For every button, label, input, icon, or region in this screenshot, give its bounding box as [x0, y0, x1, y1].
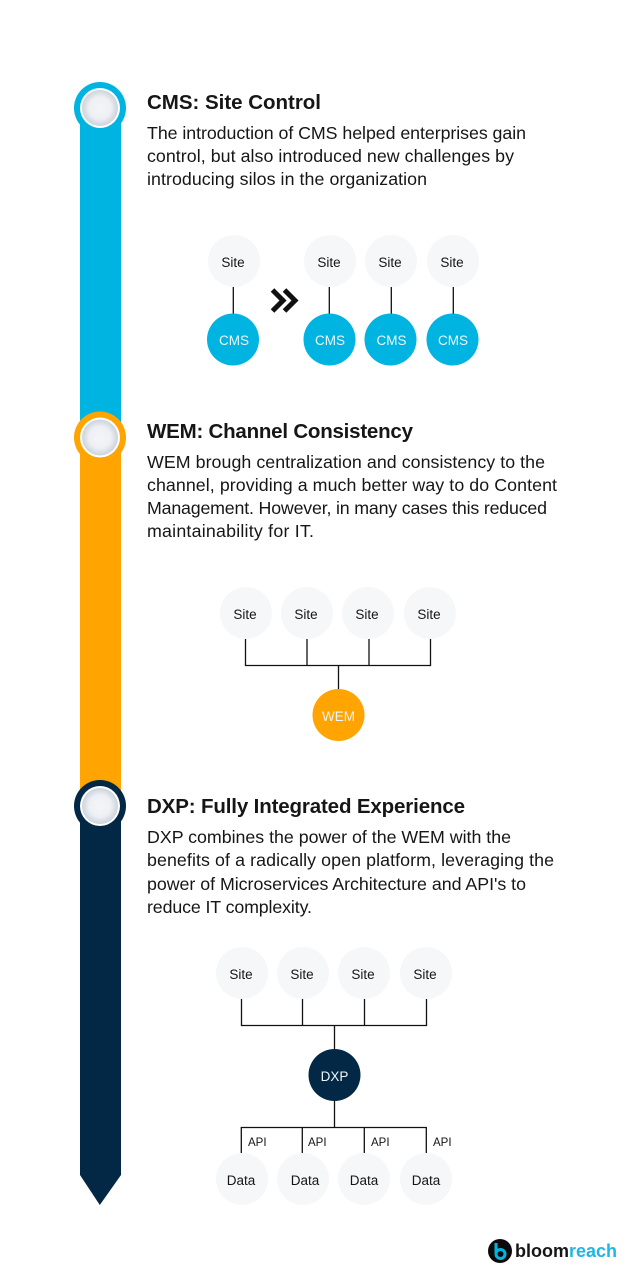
text block: WEM: WEM brough centralization and consistency to the [147, 452, 545, 472]
marker: WEM [74, 412, 126, 464]
diagram: CMS silos: CMS [315, 333, 345, 348]
text block: DXP: benefits of a radically open platform, leveraging the [147, 850, 554, 870]
diagram: CMS silos: Site [440, 255, 464, 270]
diagram: CMS silos: Site [378, 255, 402, 270]
text block: CMS: control, but also introduced new challenges by [147, 146, 514, 166]
text block: DXP: power of Microservices Architecture and API's to [147, 874, 526, 894]
icon: double chevron arrow [272, 290, 295, 311]
timeline segment: WEM [80, 438, 121, 798]
wordmark: bloomreach [515, 1241, 617, 1261]
panel: CMS [147, 91, 526, 366]
text block: DXP: DXP combines the power of the WEM with the [147, 827, 511, 847]
diagram: WEM hub: Site [417, 607, 441, 622]
logo: bloomreach [488, 1239, 617, 1263]
diagram: CMS silos: Site [317, 255, 341, 270]
timeline [74, 82, 126, 1205]
diagram: DXP hub with APIs: DXP [321, 1069, 348, 1084]
diagram: WEM hub: Site [355, 607, 379, 622]
timeline segment: DXP with arrow tip [80, 806, 121, 1205]
diagram: WEM hub: Site [294, 607, 318, 622]
panel: WEM [147, 420, 557, 741]
text block: WEM: channel, providing a much better way to do Content [147, 475, 557, 495]
heading: CMS: CMS: Site Control [147, 91, 321, 114]
icon: bloomreach mark [488, 1239, 512, 1263]
text block: CMS: The introduction of CMS helped enterprises gain [147, 123, 526, 143]
text block: CMS: introducing silos in the organization [147, 169, 427, 189]
text block: WEM: Management. However, in many cases this reduced [147, 498, 547, 518]
text block: DXP: reduce IT complexity. [147, 897, 312, 917]
diagram: DXP hub with APIs: API [248, 1137, 267, 1149]
heading: DXP: DXP: Fully Integrated Experience [147, 795, 465, 818]
text block: CMS [147, 123, 526, 189]
diagram: DXP hub with APIs: Site [413, 967, 437, 982]
diagram: DXP hub with APIs: Site [290, 967, 314, 982]
diagram: WEM hub [220, 587, 456, 741]
text block: WEM [147, 452, 557, 541]
diagram: DXP hub with APIs: API [371, 1137, 390, 1149]
diagram: DXP hub with APIs: Data [291, 1173, 320, 1188]
diagram: CMS silos: Site [221, 255, 245, 270]
diagram: CMS silos [207, 235, 479, 366]
panel: DXP [147, 795, 554, 1205]
diagram: DXP hub with APIs: Data [227, 1173, 256, 1188]
heading: WEM: WEM: Channel Consistency [147, 420, 414, 443]
text block: DXP [147, 827, 554, 917]
diagram: DXP hub with APIs: Site [229, 967, 253, 982]
diagram: CMS silos: CMS [376, 333, 406, 348]
diagram: CMS silos: CMS [438, 333, 468, 348]
marker: CMS [74, 82, 126, 134]
marker: DXP [74, 780, 126, 832]
diagram: WEM hub: WEM [322, 709, 355, 724]
diagram: DXP hub with APIs: Data [412, 1173, 441, 1188]
diagram: DXP hub with APIs: API [433, 1137, 452, 1149]
text block: WEM: maintainability for IT. [147, 521, 314, 541]
diagram: DXP hub with APIs: API [308, 1137, 327, 1149]
diagram: DXP hub with APIs: Site [351, 967, 375, 982]
diagram: WEM hub: Site [233, 607, 257, 622]
diagram: DXP hub with APIs: Data [350, 1173, 379, 1188]
timeline segment: CMS [80, 108, 121, 428]
diagram: DXP hub with APIs [216, 947, 452, 1205]
diagram: CMS silos: CMS [219, 333, 249, 348]
